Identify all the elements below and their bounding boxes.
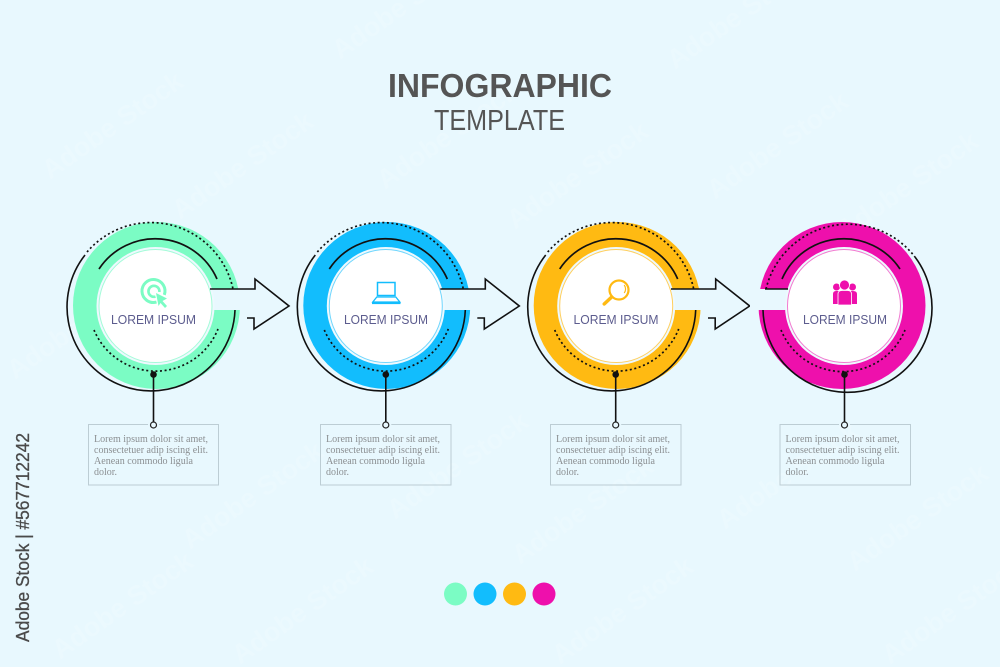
colour legend dots — [444, 582, 556, 606]
connector — [150, 371, 157, 428]
title: INFOGRAPHIC — [388, 67, 612, 104]
text box: Aenean commodo ligula — [326, 456, 426, 467]
text: Adobe Stock — [506, 450, 659, 570]
text box: Lorem ipsum dolor sit amet, — [786, 434, 900, 445]
label: LOREM IPSUM — [574, 313, 659, 327]
stock id side text: Adobe Stock | #567712242 — [13, 433, 33, 642]
title: TEMPLATE — [434, 105, 565, 137]
text box: dolor. — [786, 467, 809, 478]
text: Adobe Stock — [381, 405, 534, 525]
text: Adobe Stock — [46, 545, 199, 665]
text box: consectetuer adip iscing elit. — [556, 445, 670, 456]
text: Adobe Stock — [831, 125, 984, 245]
text box: dolor. — [326, 467, 349, 478]
step 3: yellow circle — [528, 222, 750, 485]
title — [388, 67, 612, 137]
text box — [88, 424, 218, 485]
connector — [841, 371, 848, 428]
text: Adobe Stock — [711, 415, 864, 535]
text: Adobe Stock — [501, 115, 654, 235]
step 1: green circle — [67, 222, 289, 485]
text box: Aenean commodo ligula — [556, 456, 656, 467]
label: LOREM IPSUM — [111, 313, 196, 327]
step 2: blue circle — [297, 222, 519, 485]
text box — [550, 424, 681, 485]
text: Adobe Stock — [701, 85, 854, 205]
label: LOREM IPSUM — [344, 313, 428, 327]
text: Adobe Stock — [546, 550, 699, 667]
text box: Lorem ipsum dolor sit amet, — [94, 434, 208, 445]
text: Adobe Stock — [36, 65, 189, 185]
icon: magnifier — [604, 280, 628, 304]
text box: Lorem ipsum dolor sit amet, — [556, 434, 670, 445]
icon: target cursor — [142, 280, 167, 308]
text: Adobe Stock — [176, 435, 329, 555]
text box: Aenean commodo ligula — [94, 456, 194, 467]
text: Adobe Stock — [841, 457, 994, 577]
text box: dolor. — [94, 467, 117, 478]
text box: dolor. — [556, 467, 579, 478]
text: Adobe Stock — [1, 265, 154, 385]
text box: Aenean commodo ligula — [786, 456, 885, 467]
connector — [612, 371, 619, 428]
text box — [780, 424, 910, 485]
icon: people — [833, 280, 857, 305]
connector — [382, 371, 389, 428]
text box: consectetuer adip iscing elit. — [326, 445, 440, 456]
arrow — [440, 279, 519, 329]
label: LOREM IPSUM — [803, 313, 887, 327]
step 4: magenta circle — [750, 222, 932, 485]
arrow — [671, 279, 750, 329]
text box: consectetuer adip iscing elit. — [94, 445, 208, 456]
text: Adobe Stock — [166, 105, 319, 225]
icon: laptop — [372, 282, 400, 304]
text: Adobe Stock — [371, 75, 524, 195]
text box: Lorem ipsum dolor sit amet, — [326, 434, 440, 445]
text box — [320, 424, 451, 485]
text box: consectetuer adip iscing elit. — [786, 445, 900, 456]
arrow — [210, 279, 289, 329]
text: Adobe Stock — [226, 550, 379, 667]
